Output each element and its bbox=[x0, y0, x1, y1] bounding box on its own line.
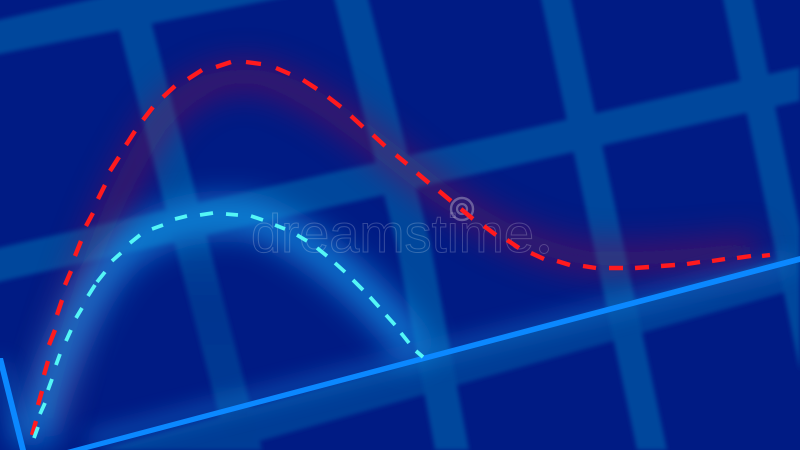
axis glow bbox=[0, 262, 795, 441]
cyan dashed curve bbox=[34, 213, 423, 438]
cyan curve glow bbox=[18, 216, 419, 450]
watermark: dreamstime bbox=[251, 204, 534, 264]
red dashed curve bbox=[32, 62, 770, 435]
red curve glow bbox=[46, 76, 760, 420]
axis lines bbox=[0, 256, 800, 450]
